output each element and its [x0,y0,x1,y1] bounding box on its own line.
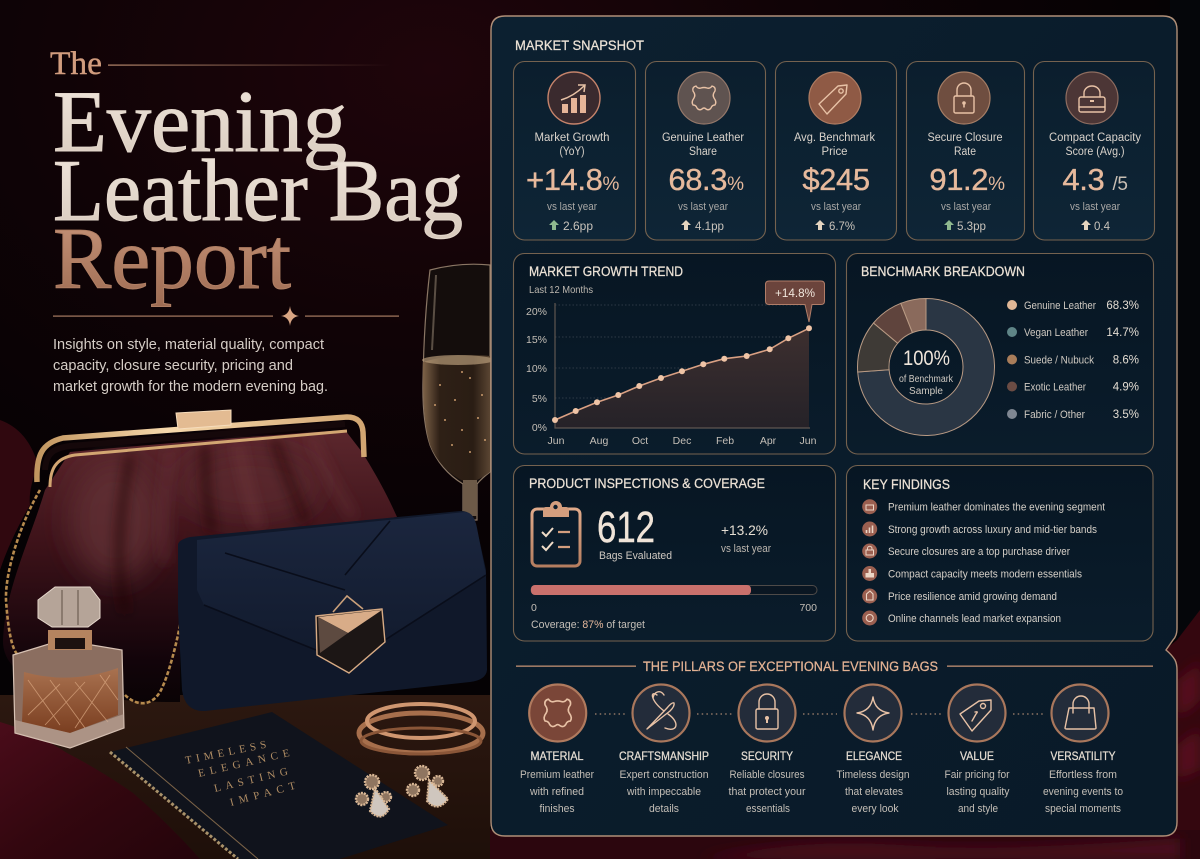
icon: handbag [1066,72,1118,124]
card: average benchmark price [776,62,896,240]
line chart: Apr [760,435,777,447]
pillar: security: essentials [746,803,790,815]
pillar: value [944,684,1010,815]
pillar: material: with refined [529,786,584,798]
card: market growth: Market Growth [534,132,610,144]
card: compact capacity score: Compact Capacity [1049,132,1141,144]
card: average benchmark price: vs last year [811,201,861,213]
card: market growth: (YoY) [560,146,585,158]
panel: product inspections and coverage: Bags Evaluated [599,550,672,562]
legend: Exotic Leather [1024,382,1086,394]
panel: product inspections and coverage: +13.2% [721,522,768,538]
finding 6 [862,610,1061,626]
card: market growth: vs last year [547,201,597,213]
dotted connectors [595,713,1044,715]
title: Evening: Evening [53,74,347,171]
line chart: 20% [526,306,547,318]
pillar: versatility: Effortless from [1049,769,1117,781]
pillar: value: VALUE [960,749,994,763]
velvet drape lower left [0,722,200,859]
card: average benchmark price: Price [822,146,848,158]
card: secure closure rate [906,62,1024,240]
donut centre label: Sample [909,386,943,397]
icon: leather hide [529,684,586,742]
description: market growth for the modern evening bag. [53,379,328,395]
pillar: security: Reliable closures [730,769,805,781]
perfume bottle [13,587,124,748]
description: Insights on style, material quality, compact [53,337,324,353]
photo: still life of evening bags [0,264,494,859]
crystal earrings [356,766,448,817]
pillar: craftsmanship [619,684,709,815]
divider with star [53,306,399,326]
pillar: security [728,684,806,815]
panel: product inspections and coverage: 0 [531,602,537,614]
gold bangles [359,704,483,754]
card: compact capacity score: 4.3 /5 [1062,162,1128,197]
heading: market snapshot: MARKET SNAPSHOT [515,38,644,53]
legend: Suede / Nubuck [1024,354,1094,366]
progress bar [531,585,817,595]
panel: product inspections and coverage: vs last year [721,543,771,555]
gold chain strap [6,490,190,703]
line chart: 15% [526,334,547,346]
icon: tote bag [1052,684,1108,742]
legend: Vegan Leather [1024,327,1088,339]
line chart: Jun [548,435,565,447]
line chart: 0% [532,422,547,434]
pillar: versatility [1043,684,1123,815]
notebook: LASTING [213,765,292,795]
pillar: craftsmanship: CRAFTSMANSHIP [619,749,709,763]
line chart: 5% [532,393,547,405]
icon: price tag [809,72,861,124]
table surface [0,695,490,859]
card: average benchmark price: Avg. Benchmark [794,132,875,144]
legend: 4.9% [1113,382,1139,394]
panel: product inspections and coverage: PRODUCT INSPECTIONS & COVERAGE [529,476,765,491]
notebook [110,712,448,859]
card: genuine leather share: vs last year [678,201,728,213]
panel: product inspections and coverage: 612 [597,503,655,552]
line chart: Oct [632,435,648,447]
coverage note: Coverage: 87% of target [531,619,645,631]
donut chart [858,298,995,435]
card: secure closure rate: vs last year [941,201,991,213]
finding 5: Price resilience amid growing demand [888,591,1057,603]
title: The: The [50,46,102,82]
legend: 8.6% [1113,354,1139,366]
pillar: elegance: ELEGANCE [846,749,902,763]
pillar: material: MATERIAL [530,749,584,763]
card: genuine leather share: 68.3% [668,162,744,197]
pillar: craftsmanship: details [649,803,679,815]
legend: Genuine Leather [1024,300,1096,312]
panel: benchmark breakdown: BENCHMARK BREAKDOWN [861,264,1025,279]
card: secure closure rate: 91.2% [929,162,1005,197]
notebook: IMPACT [229,779,299,809]
pillar: value: and style [958,803,998,815]
icon: four point star [844,684,902,742]
card: market growth: 2.6pp [563,219,593,233]
line chart: Feb [716,435,734,447]
pillar: versatility: VERSATILITY [1050,749,1116,763]
pillar: material: finishes [540,803,575,815]
pillar: value: Fair pricing for [944,769,1010,781]
legend: Fabric / Other [1024,409,1085,421]
card: secure closure rate: 5.3pp [957,219,986,233]
description: capacity, closure security, pricing and [53,358,293,374]
panel: product inspections and coverage [514,466,836,641]
champagne flute [422,264,494,520]
title: Report: Report [53,211,291,308]
card: average benchmark price: 6.7% [829,219,855,233]
card: market growth: +14.8% [526,162,619,197]
card: secure closure rate: Secure Closure [928,132,1002,144]
pillar: material [520,684,594,815]
pillar: elegance: every look [852,803,899,815]
finding 3: Secure closures are a top purchase driver [888,546,1070,558]
description [53,337,328,395]
legend: 68.3% [1106,300,1139,312]
main dashboard panel [491,16,1177,836]
pillar: value: lasting quality [946,786,1010,798]
velvet drape upper left [0,420,38,570]
panel: key findings [846,466,1153,641]
finding 2 [862,522,1097,536]
heading: the pillars: THE PILLARS OF EXCEPTIONAL EVENING BAGS [643,659,938,674]
card: genuine leather share: Genuine Leather [662,132,744,144]
line chart: Aug [590,435,608,447]
finding 4 [862,566,1082,581]
notebook: TIMELESS [184,738,270,767]
card: compact capacity score: vs last year [1070,201,1120,213]
card: compact capacity score: 0.4 [1094,219,1110,233]
line chart: Jun [800,435,817,447]
pillar: security: SECURITY [741,749,793,763]
legend: 14.7% [1106,327,1139,339]
finding 1: Premium leather dominates the evening segment [888,502,1105,514]
notebook: ELEGANCE [197,747,293,780]
burgundy frame clutch [3,410,397,702]
pillar: elegance [836,684,910,815]
panel: benchmark breakdown [846,254,1154,454]
card: compact capacity score [1034,62,1154,240]
panel: key findings: KEY FINDINGS [863,477,950,492]
icon: leather hide [678,72,730,124]
icon: clipboard [532,501,580,566]
callout: +14.8% [766,281,824,322]
finding 4: Compact capacity meets modern essentials [888,568,1082,580]
finding 1 [862,499,1105,514]
title: Leather Bag: Leather Bag [53,143,463,240]
line chart [526,303,817,447]
finding 2: Strong growth across luxury and mid-tier bands [888,524,1097,536]
finding 5 [862,588,1057,604]
panel: market growth trend: Last 12 Months [529,284,593,296]
panel: market growth trend: MARKET GROWTH TREND [529,264,683,279]
icon: price tag [948,684,1006,742]
card: market growth [514,62,636,240]
icon: growth chart [548,72,600,124]
finding 3 [862,544,1070,558]
legend [1007,300,1139,421]
pillar: versatility: evening events to [1043,786,1123,798]
pillar: craftsmanship: with impeccable [626,786,701,798]
donut centre label [899,347,954,397]
card: compact capacity score: Score (Avg.) [1066,146,1125,158]
card: average benchmark price: $245 [802,162,870,197]
callout: +14.8%: +14.8% [775,286,815,300]
pillar: security: that protect your [728,786,806,798]
donut centre label: of Benchmark [899,374,954,385]
icon: padlock [738,684,796,742]
title block [50,46,463,308]
card: genuine leather share: Share [689,146,717,158]
pillar: craftsmanship: Expert construction [620,769,708,781]
donut centre label: 100% [903,347,950,370]
pillar: material: Premium leather [520,769,594,781]
card: genuine leather share: 4.1pp [695,219,724,233]
panel: market growth trend [514,254,836,454]
card: secure closure rate: Rate [954,146,976,158]
icon: needle and thread [632,684,690,742]
icon: padlock [938,72,990,124]
line chart: 10% [526,363,547,375]
pillar: versatility: special moments [1045,803,1121,815]
legend: 3.5% [1113,409,1139,421]
finding 6: Online channels lead market expansion [888,613,1061,625]
pillar: elegance: that elevates [845,786,903,798]
line chart: Dec [673,435,691,447]
panel: product inspections and coverage: 700 [799,602,817,614]
pillar: elegance: Timeless design [836,769,910,781]
navy envelope clutch [178,511,487,711]
card: genuine leather share [646,62,766,240]
